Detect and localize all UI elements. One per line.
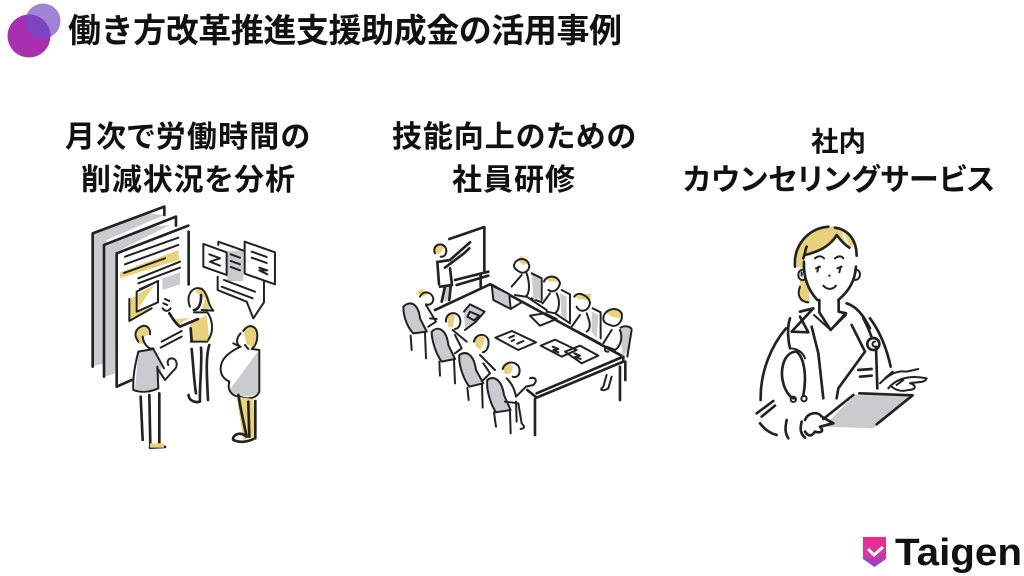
heading: column 1 <box>65 121 310 197</box>
icon: overlapping purple circles <box>8 4 60 58</box>
heading: column 2: 技能向上のための <box>392 121 636 154</box>
laptop <box>464 284 522 330</box>
seated people right <box>512 256 622 390</box>
hands <box>805 369 927 435</box>
heading: column 3: 社内 <box>811 126 866 157</box>
heading: column 3 <box>683 126 995 197</box>
hair <box>797 226 855 302</box>
heading: column 1: 削減状況を分析 <box>81 164 295 197</box>
illustration: meeting room training <box>403 227 632 435</box>
person: man from behind in grey coat <box>221 325 259 442</box>
face and head <box>795 227 860 302</box>
heading: column 2 <box>392 121 636 197</box>
person: woman pointing <box>163 287 213 402</box>
clipboard <box>823 393 913 428</box>
coat and body <box>757 300 891 438</box>
seated people left <box>416 289 536 429</box>
title: 働き方改革推進支援助成金の活用事例 <box>68 12 622 49</box>
chairs left <box>403 298 632 433</box>
table <box>435 284 625 435</box>
illustration: team reviewing documents <box>93 207 275 448</box>
stethoscope <box>782 318 879 402</box>
presenter <box>434 242 470 302</box>
heading: column 2: 社員研修 <box>452 164 575 197</box>
icon: shield check <box>863 537 886 567</box>
documents on table <box>495 313 598 363</box>
heading: column 1: 月次で労働時間の <box>65 121 310 154</box>
speech cards <box>203 242 275 318</box>
person: man with grey shirt <box>133 326 177 448</box>
whiteboard <box>449 227 488 287</box>
illustration: counsellor doctor with clipboard <box>757 226 927 438</box>
logo: Taigen: Taigen <box>895 532 1022 574</box>
heading: column 3: カウンセリングサービス <box>683 164 995 197</box>
